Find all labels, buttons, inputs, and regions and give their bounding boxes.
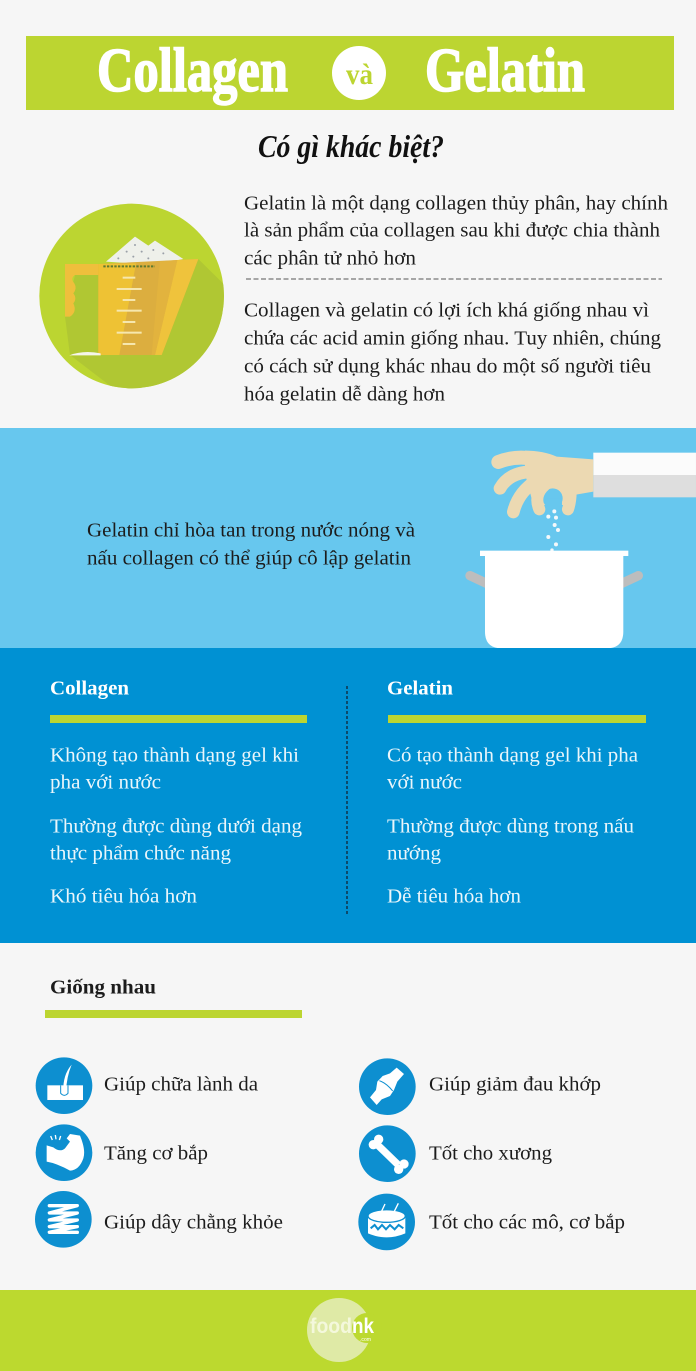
title word: Collagen: Collagen [97, 37, 288, 105]
icon: ligament spring [35, 1191, 92, 1248]
band text: Gelatin chỉ hòa tan trong nước nóng và [87, 520, 415, 542]
label: muscle: Tăng cơ bắp [104, 1142, 208, 1164]
intro paragraph: benefits: chứa các acid amin giống nhau. Tuy nhiên, chúng [244, 328, 661, 350]
logo: foodnk [307, 1298, 382, 1362]
subtitle: Có gì khác biệt? [258, 128, 444, 164]
label: ligaments: Giúp dây chằng khỏe [104, 1212, 283, 1234]
icon: tissue [358, 1194, 415, 1250]
icon: joint [359, 1058, 416, 1115]
intro paragraph: benefits [244, 300, 661, 406]
logo: foodnk: food [310, 1315, 352, 1338]
column: Collagen [50, 678, 307, 908]
panel: comparison columns [0, 648, 696, 943]
column: Collagen: pha với nước [50, 772, 161, 794]
heading: Giống nhau [45, 976, 302, 1018]
intro paragraph: benefits: hóa gelatin dễ dàng hơn [244, 384, 445, 406]
column: Gelatin: Thường được dùng trong nấu [387, 816, 634, 838]
label: bones: Tốt cho xương [429, 1142, 552, 1164]
column: Collagen: thực phẩm chức năng [50, 842, 231, 864]
title banner [26, 36, 674, 110]
intro paragraph: definition: các phân tử nhỏ hơn [244, 248, 416, 270]
column: Gelatin: với nước [387, 772, 462, 794]
icon: bone [359, 1125, 416, 1182]
circle badge: và [332, 46, 386, 100]
column: Gelatin: Gelatin [387, 678, 454, 700]
column: Collagen: Collagen [50, 678, 130, 700]
intro paragraph: benefits: Collagen và gelatin có lợi ích khá giống nhau vì [244, 300, 649, 322]
band text [87, 520, 415, 570]
column: Gelatin [387, 678, 646, 908]
column: Collagen: Thường được dùng dưới dạng [50, 816, 302, 838]
column: Gelatin: Dễ tiêu hóa hơn [387, 886, 521, 908]
title word: Gelatin: Gelatin [425, 37, 585, 105]
label: joint pain: Giúp giảm đau khớp [429, 1074, 601, 1096]
intro paragraph: benefits: có cách sử dụng khác nhau do một số người tiêu [244, 356, 651, 378]
circle badge: và: và [346, 58, 373, 91]
icon: flexed arm [36, 1124, 92, 1181]
footer band [0, 1290, 696, 1371]
icon: measuring cup with powder [39, 204, 224, 388]
icon: skin and hair [36, 1057, 92, 1114]
label: tissues and muscles: Tốt cho các mô, cơ bắp [429, 1212, 625, 1234]
intro paragraph: definition: là sản phẩm của collagen sau khi được chia thành [244, 220, 660, 242]
intro paragraph: definition: Gelatin là một dạng collagen thủy phân, hay chính [244, 192, 668, 214]
column: Collagen: Khó tiêu hóa hơn [50, 886, 197, 908]
column: Gelatin: nướng [387, 842, 441, 864]
intro paragraph: definition [244, 192, 668, 270]
column: Collagen: Không tạo thành dạng gel khi [50, 744, 299, 766]
heading: Giống nhau: Giống nhau [50, 976, 156, 998]
logo: foodnk: nk [352, 1315, 374, 1338]
illustration: hand sprinkling into pot [470, 451, 696, 648]
band text: nấu collagen có thể giúp cô lập gelatin [87, 548, 411, 570]
label: healing skin: Giúp chữa lành da [104, 1074, 258, 1096]
panel: light blue cooking band [0, 428, 696, 649]
logo: foodnk: .com [360, 1337, 371, 1343]
column: Gelatin: Có tạo thành dạng gel khi pha [387, 744, 638, 766]
